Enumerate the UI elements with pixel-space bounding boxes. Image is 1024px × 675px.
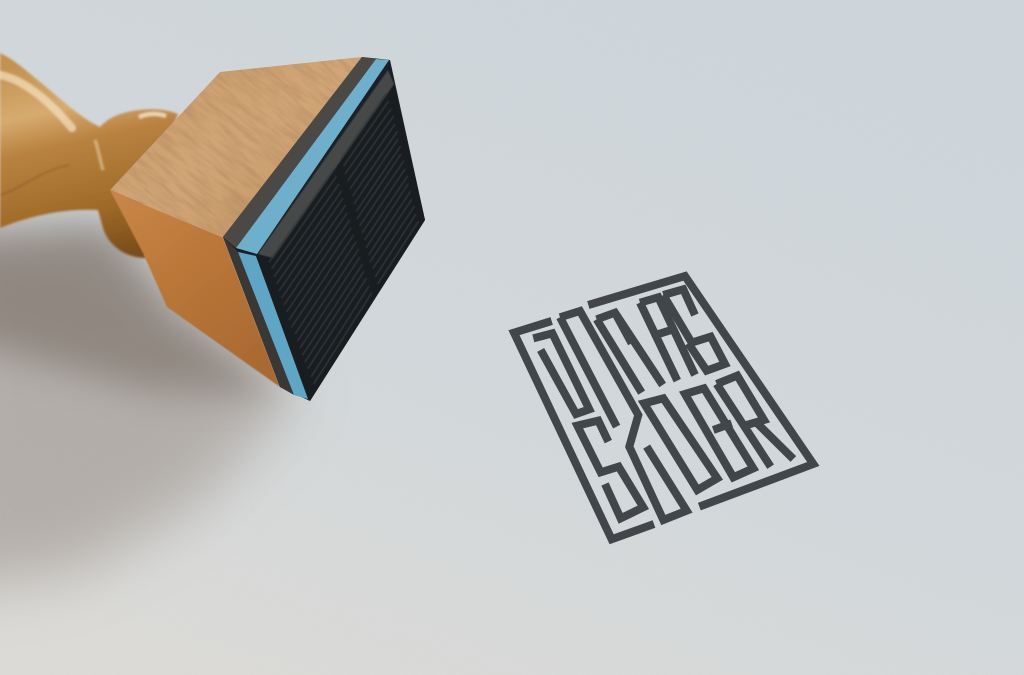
raised maze lines on the rubber xyxy=(269,94,419,384)
foam layer along the left xyxy=(223,237,294,395)
first line: letter N xyxy=(597,313,663,393)
foam layer along the top xyxy=(223,57,376,248)
frame: upper right xyxy=(588,276,813,507)
dark backing under the layers xyxy=(223,57,425,401)
first line: letter S xyxy=(663,289,725,371)
frame: lower left xyxy=(514,321,654,539)
blue strip along the left xyxy=(238,252,308,399)
wood block top face xyxy=(110,57,362,237)
rubber face xyxy=(256,68,425,401)
stamp: wooden handle and block with rubber face xyxy=(0,52,425,401)
second line: letter R xyxy=(717,376,793,467)
second line: letter D xyxy=(644,398,717,490)
first line: letter J xyxy=(560,311,687,520)
second line: letter S xyxy=(577,421,643,518)
first line: letter D xyxy=(533,333,589,414)
first line: letter A xyxy=(640,297,695,381)
stamped maze logo print xyxy=(514,276,813,539)
second line: letter E xyxy=(685,388,753,477)
blue strip along the top xyxy=(236,59,389,254)
cast shadow of the stamp xyxy=(0,225,295,590)
wood block front face xyxy=(110,190,280,387)
handle xyxy=(0,53,178,258)
